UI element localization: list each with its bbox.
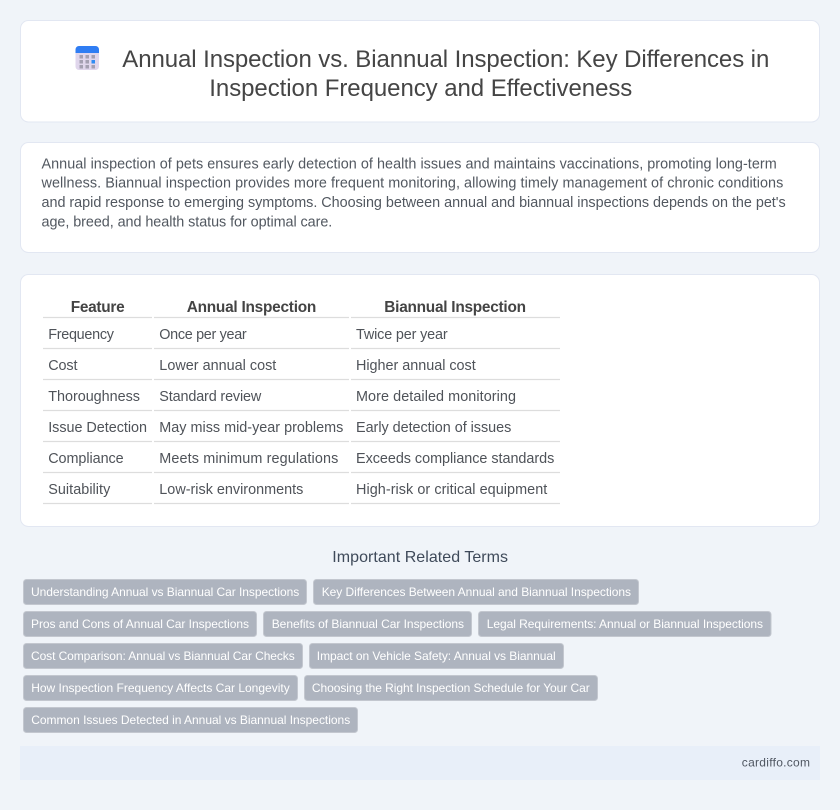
table row: thoroughness xyxy=(48,389,516,405)
tag xyxy=(478,612,771,636)
table header xyxy=(71,299,526,316)
tag xyxy=(310,644,564,668)
table row: frequency xyxy=(48,327,448,343)
table row: cost xyxy=(48,358,476,374)
text block: summary: and rapid response to emerging symptoms. Choosing between annual and biannual inspections depends on the pet's xyxy=(42,195,786,211)
tag: Impact on Vehicle Safety: Annual vs Biannual xyxy=(317,649,556,663)
tag: Benefits of Biannual Car Inspections xyxy=(272,617,464,631)
table row: frequency: Twice per year xyxy=(356,327,448,343)
table row: compliance: Meets minimum regulations xyxy=(159,451,338,467)
tag: Key Differences Between Annual and Biannual Inspections xyxy=(322,585,631,599)
icon: calendar xyxy=(76,46,99,70)
table row: compliance: Exceeds compliance standards xyxy=(356,451,554,467)
tag: How Inspection Frequency Affects Car Longevity xyxy=(31,681,290,695)
title: Inspection Frequency and Effectiveness xyxy=(209,75,632,102)
tag: Legal Requirements: Annual or Biannual Inspections xyxy=(487,617,763,631)
tag xyxy=(24,644,302,668)
text block: summary xyxy=(40,156,786,231)
table row: issue detection: May miss mid-year problems xyxy=(159,420,343,436)
text block: summary: wellness. Biannual inspection provides more frequent monitoring, allowing timely management of chronic conditions xyxy=(40,176,783,192)
related term tags xyxy=(24,580,771,732)
table row: frequency: Frequency xyxy=(48,327,115,343)
tag: Understanding Annual vs Biannual Car Inspections xyxy=(31,585,299,599)
tag xyxy=(314,580,638,604)
tag: Pros and Cons of Annual Car Inspections xyxy=(31,617,249,631)
table row: suitability: Suitability xyxy=(48,482,111,498)
tag xyxy=(24,676,298,700)
footer: cardiffo.com xyxy=(742,756,810,770)
table row: frequency: Once per year xyxy=(159,327,247,343)
tag: Choosing the Right Inspection Schedule for Your Car xyxy=(312,681,590,695)
text block: summary: Annual inspection of pets ensures early detection of health issues and maintains vaccinations, promoting long-term xyxy=(42,156,777,172)
table row: suitability xyxy=(48,482,547,498)
table row: thoroughness: More detailed monitoring xyxy=(356,389,516,405)
table row: thoroughness: Thoroughness xyxy=(48,389,140,405)
panel: summary text xyxy=(20,142,820,252)
table header: Feature xyxy=(71,299,125,316)
table row: issue detection: Issue Detection xyxy=(48,420,147,436)
table row: cost: Higher annual cost xyxy=(356,358,476,374)
table row: compliance xyxy=(48,451,554,467)
tag xyxy=(24,580,306,604)
table row: compliance: Compliance xyxy=(48,451,124,467)
panel: comparison table xyxy=(20,274,820,526)
table row: cost: Lower annual cost xyxy=(159,358,276,374)
title xyxy=(122,46,769,102)
table row: issue detection xyxy=(48,420,511,436)
title: Annual Inspection vs. Biannual Inspection: Key Differences in xyxy=(122,46,769,73)
table header: Annual Inspection xyxy=(187,299,316,316)
table row: cost: Cost xyxy=(48,358,78,374)
tag: Cost Comparison: Annual vs Biannual Car Checks xyxy=(31,649,295,663)
table row: thoroughness: Standard review xyxy=(159,389,262,405)
panel: header xyxy=(20,20,820,122)
heading: related terms: Important Related Terms xyxy=(332,549,508,566)
table row: suitability: High-risk or critical equipment xyxy=(356,482,547,498)
table row: suitability: Low-risk environments xyxy=(159,482,303,498)
tag xyxy=(24,708,358,732)
tag: Common Issues Detected in Annual vs Biannual Inspections xyxy=(31,713,350,727)
table header: Biannual Inspection xyxy=(384,299,526,316)
text block: summary: age, breed, and health status for optimal care. xyxy=(42,215,332,231)
table row: issue detection: Early detection of issues xyxy=(356,420,511,436)
tag xyxy=(264,612,472,636)
tag xyxy=(304,676,598,700)
tag xyxy=(24,612,256,636)
footer xyxy=(20,746,820,780)
